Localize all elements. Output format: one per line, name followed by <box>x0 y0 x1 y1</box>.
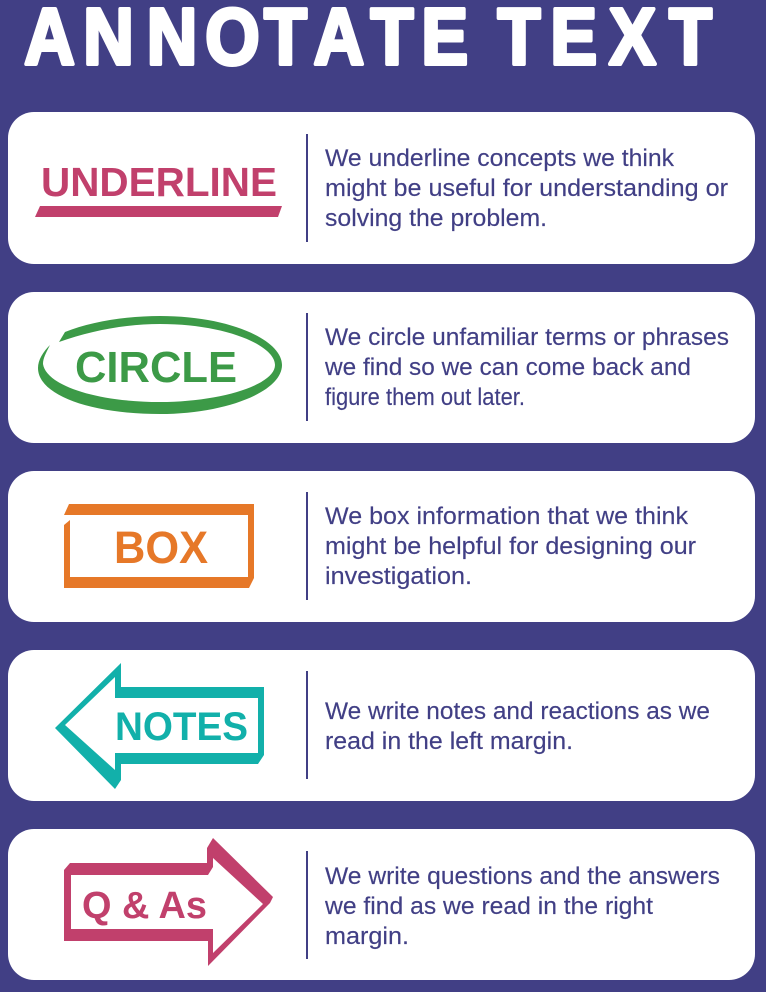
description: circle: figure them out later. <box>325 384 525 411</box>
description: underline: We underline concepts we think <box>325 145 675 172</box>
description: notes <box>325 698 710 755</box>
description: box <box>325 503 696 590</box>
panel: circle <box>8 292 755 443</box>
card background <box>8 112 755 264</box>
divider <box>306 671 308 779</box>
icon: right arrow <box>64 838 273 966</box>
icon: underline bar <box>35 206 282 217</box>
description: questions and answers: we find as we read in the right <box>324 893 653 920</box>
divider <box>306 134 308 242</box>
description: questions and answers: margin. <box>325 923 409 950</box>
description: questions and answers: We write questions and the answers <box>325 863 720 890</box>
description: box: might be helpful for designing our <box>325 533 696 560</box>
card background <box>8 829 755 980</box>
description: circle: we find so we can come back and <box>324 354 691 381</box>
description: circle <box>324 324 729 411</box>
label: notes: NOTES <box>115 705 248 749</box>
card background <box>8 292 755 443</box>
description: circle: We circle unfamiliar terms or phrases <box>325 324 729 351</box>
divider <box>306 313 308 421</box>
icon: left arrow <box>55 663 264 789</box>
description: underline: solving the problem. <box>325 205 547 232</box>
panel: underline <box>8 112 755 264</box>
description: underline <box>325 145 728 232</box>
icon: box outline <box>64 504 254 588</box>
icon: hand-drawn ellipse <box>38 316 282 414</box>
panel: notes <box>8 650 755 801</box>
divider <box>306 851 308 959</box>
description: notes: We write notes and reactions as we <box>325 698 710 725</box>
card background <box>8 471 755 622</box>
label: underline: UNDERLINE <box>41 159 277 205</box>
label: box: BOX <box>114 522 208 573</box>
description: underline: might be useful for understanding or <box>325 175 728 202</box>
description: questions and answers <box>324 863 720 950</box>
panel: box <box>8 471 755 622</box>
description: notes: read in the left margin. <box>325 728 573 755</box>
card background <box>8 650 755 801</box>
description: box: We box information that we think <box>325 503 689 530</box>
label: Q & As: Q & As <box>82 885 207 927</box>
divider <box>306 492 308 600</box>
description: box: investigation. <box>325 563 472 590</box>
label: circle: CIRCLE <box>75 343 237 392</box>
panel: questions and answers <box>8 829 755 980</box>
